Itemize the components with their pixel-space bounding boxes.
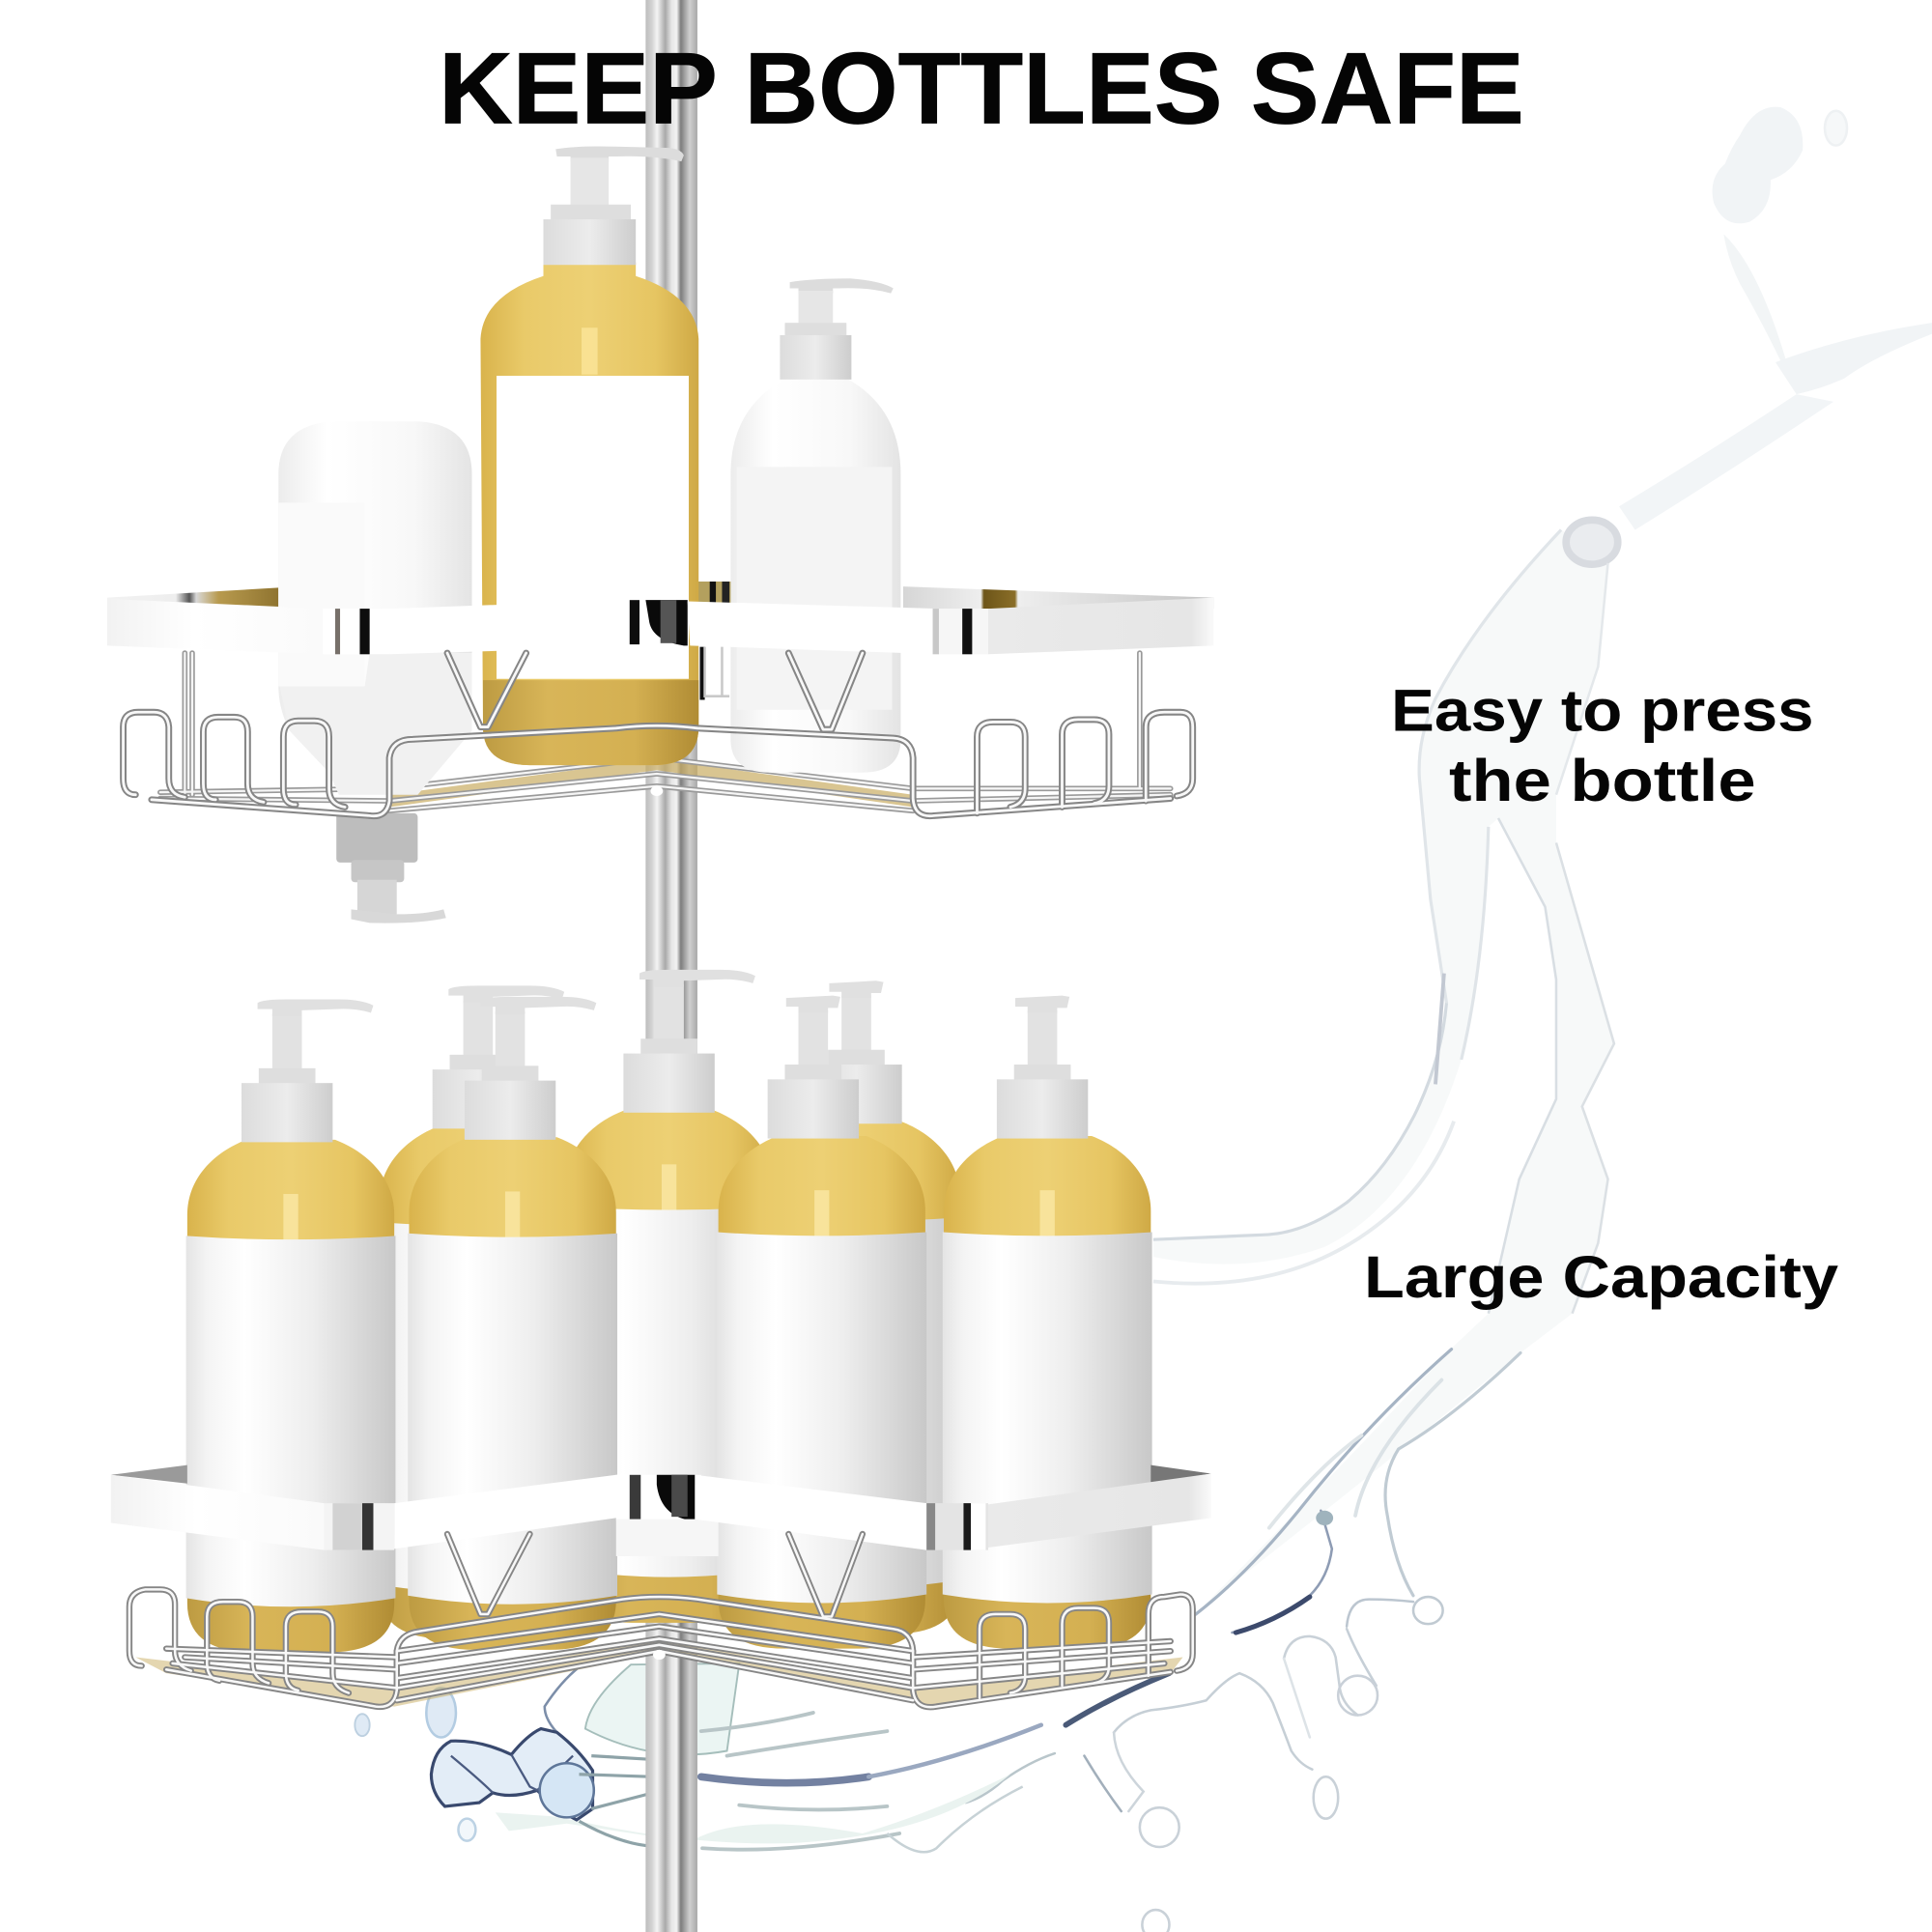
title: KEEP BOTTLES SAFE (439, 33, 1524, 146)
lower bottle: front second (408, 997, 617, 1650)
band: centre left section (394, 1475, 629, 1548)
upper bottle: tall yellow bottle (480, 146, 698, 765)
upper shelf: back rim and rear wires (107, 582, 1213, 810)
lower bottle: front third (717, 996, 926, 1649)
water stream: lower right splash (966, 1350, 1520, 1932)
band: centre left section (389, 600, 629, 654)
band: centre right section (688, 601, 939, 654)
upper shelf: front band (107, 598, 1213, 654)
lower shelf: front wire basket (129, 1534, 1193, 1707)
upper bottle: upside-down white bottle with pump (278, 421, 472, 923)
band: left section (107, 599, 323, 654)
lower shelf: front band (111, 1474, 1211, 1556)
band: right chrome corner (926, 1503, 988, 1550)
upper shelf: front wire basket (124, 653, 1193, 816)
band: dark centre gap (616, 1475, 719, 1556)
band: left chrome corner (324, 1503, 394, 1550)
band: right chrome corner (933, 609, 988, 654)
band: right section (988, 1474, 1211, 1548)
water stream: upper right (1153, 107, 1932, 1608)
lower bottle: front left (186, 999, 395, 1652)
lower bottle: back left (379, 985, 587, 1638)
upper bottle: white pump bottle (730, 278, 900, 773)
label: the bottle: the bottle (1449, 748, 1756, 813)
band: left section (111, 1475, 324, 1550)
band: centre right section (695, 1475, 926, 1550)
lower bottle: back right (752, 980, 961, 1634)
water splash: lower left (355, 1663, 1041, 1852)
lower bottle: centre (564, 970, 774, 1623)
band: dark centre gap (629, 600, 688, 647)
band: right section (988, 598, 1213, 654)
band: left chrome corner (323, 609, 389, 654)
label: large capacity: Large Capacity (1364, 1244, 1838, 1310)
lower shelf: back rim tips (111, 1465, 1211, 1484)
lower bottle: front right (943, 996, 1152, 1649)
label: easy to press: Easy to press (1391, 677, 1814, 743)
shower pole (645, 0, 697, 1932)
